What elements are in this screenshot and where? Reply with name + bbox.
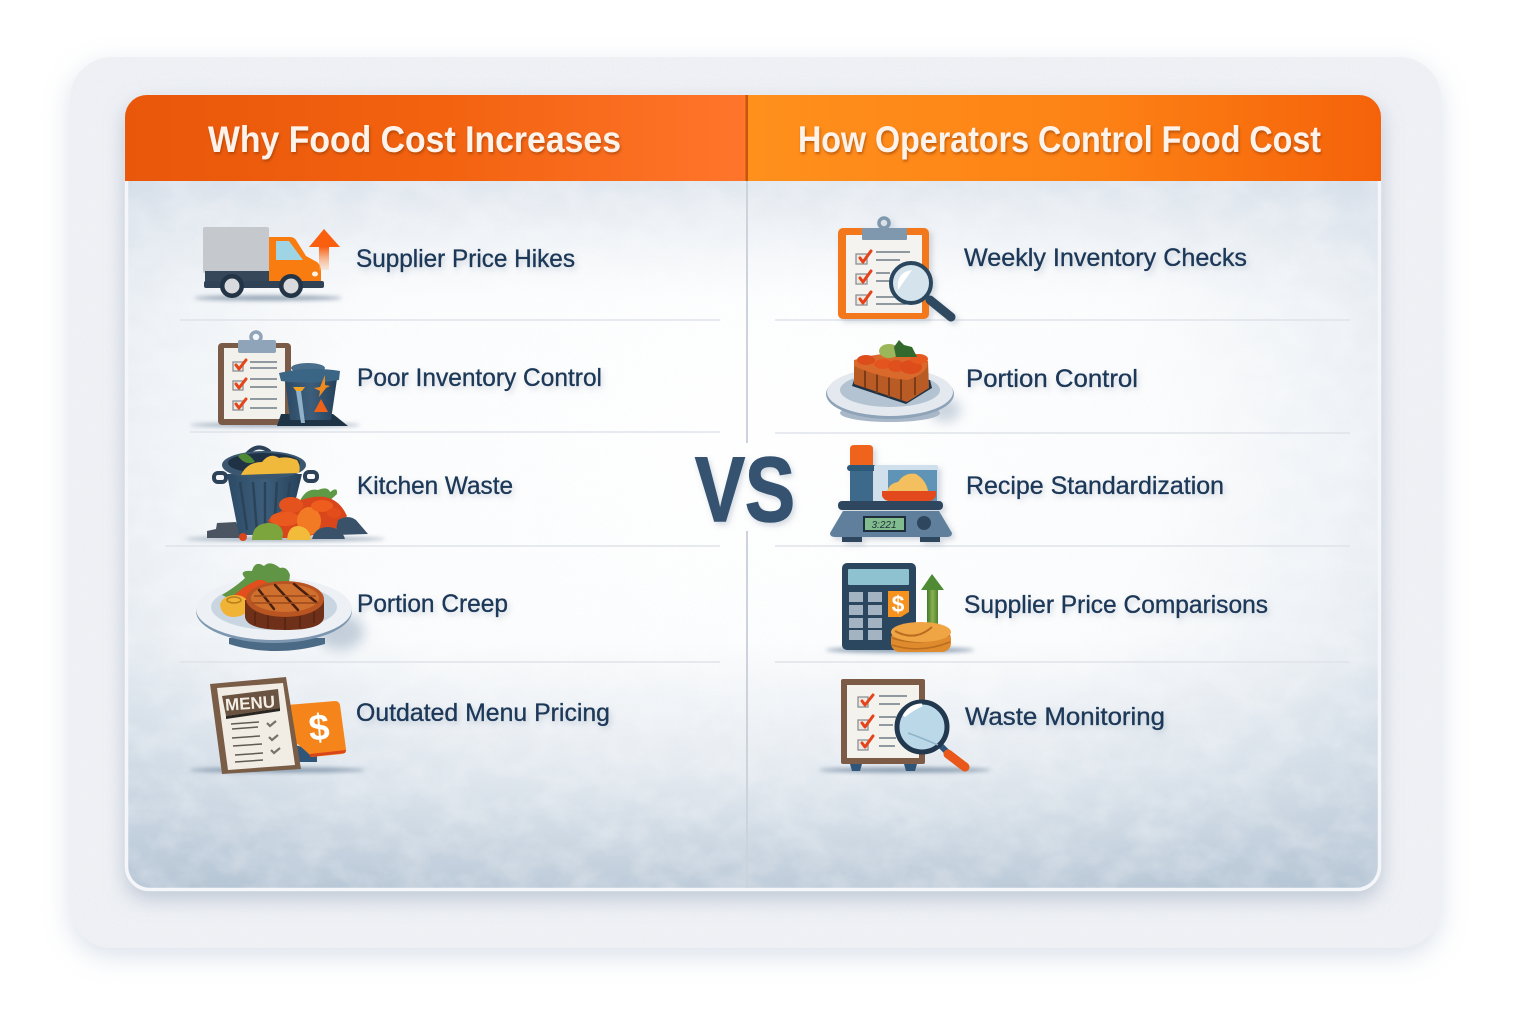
row: supplier price comparisons (826, 563, 1268, 653)
label: Portion Control (966, 365, 1138, 393)
icon: kitchen scale: 3:221 (871, 520, 897, 531)
icon: menu and price tag (189, 677, 365, 774)
left header (125, 95, 747, 181)
label: Supplier Price Hikes (356, 245, 575, 273)
VS badge: VS (695, 439, 795, 541)
label: Recipe Standardization (966, 472, 1224, 500)
icon: overflowing bin with vegetables (185, 447, 385, 541)
row: kitchen waste (185, 447, 513, 541)
row: portion creep (196, 563, 508, 651)
icon: calculator, coins and arrow (826, 563, 974, 653)
comparison panel (125, 95, 1381, 891)
label: Outdated Menu Pricing (356, 699, 610, 727)
label: Portion Creep (357, 590, 508, 618)
icon: clipboard and bin (190, 332, 360, 427)
label: Supplier Price Comparisons (964, 591, 1268, 619)
right header (746, 95, 1381, 181)
icon: kitchen scale (830, 445, 952, 542)
right heading: How Operators Control Food Cost (798, 119, 1321, 160)
left heading: Why Food Cost Increases (208, 119, 621, 160)
icon: delivery truck with up arrow (194, 227, 342, 300)
label: Waste Monitoring (965, 703, 1165, 731)
label: Weekly Inventory Checks (964, 244, 1247, 272)
row: supplier price hikes (194, 227, 575, 300)
row: outdated menu pricing (189, 677, 610, 774)
icon: menu and price tag: MENU (224, 692, 276, 715)
row: weekly inventory checks (838, 218, 1247, 319)
icon: plated dessert portion (826, 340, 961, 422)
icon: plate with steak (196, 563, 364, 651)
label: Poor Inventory Control (357, 364, 602, 392)
row: portion control (826, 340, 1138, 422)
row: poor inventory control (190, 332, 602, 427)
icon: calculator, coins and arrow: $ (892, 591, 905, 617)
label: Kitchen Waste (357, 472, 513, 500)
icon: orange clipboard with magnifier (838, 218, 951, 319)
row: recipe standardization (830, 445, 1224, 542)
outer card (70, 57, 1441, 948)
row: waste monitoring (819, 679, 1165, 772)
icon: menu and price tag: $ (307, 706, 332, 749)
icon: checklist with magnifier (819, 679, 991, 772)
